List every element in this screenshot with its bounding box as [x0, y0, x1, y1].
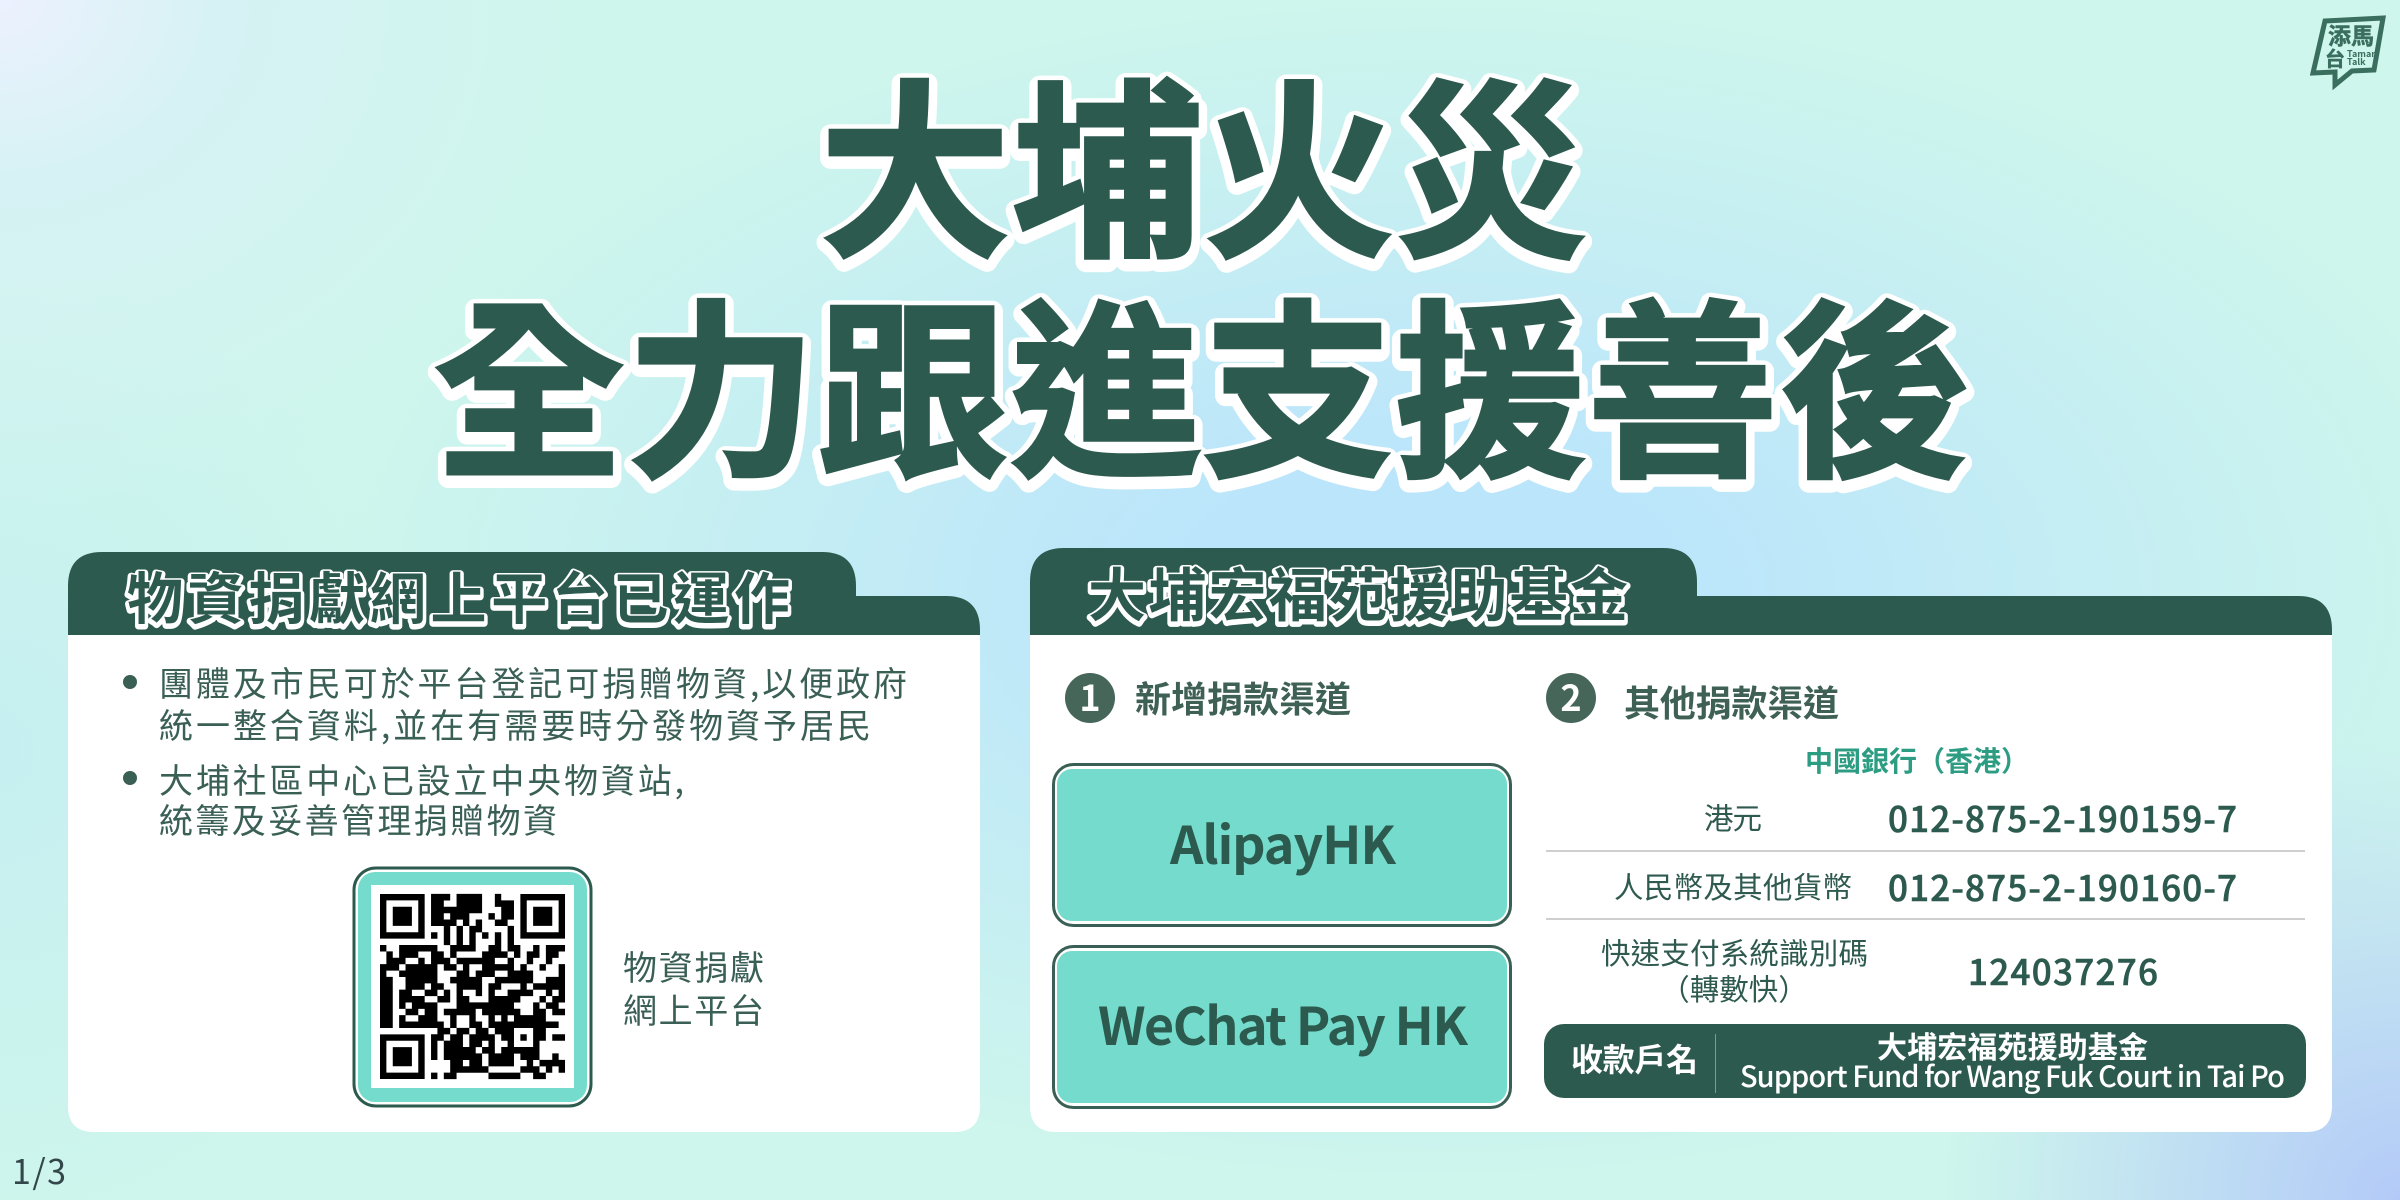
QR caption: [623, 941, 764, 1033]
title: [434, 21, 1970, 520]
section 2 heading: [1546, 670, 1839, 727]
title: 大埔火災: [820, 25, 1586, 300]
panel body: [1030, 635, 2332, 1132]
bullet list: 統籌及妥善管理捐贈物資: [159, 794, 557, 843]
account row: FPS: （轉數快）: [1660, 967, 1808, 1009]
button: AlipayHK: [1054, 764, 1510, 926]
panel heading: 物資捐獻網上平台已運作: [127, 557, 790, 638]
account row: RMB and other currencies: 012-875-2-190160-7: [1888, 861, 2237, 912]
button: WeChat Pay HK: [1054, 946, 1510, 1108]
bank name: 中國銀行（香港）: [1805, 740, 2029, 780]
logo: Tamar Talk speech bubble: Tamar: [2347, 47, 2375, 60]
account row: HKD: 港元: [1704, 796, 1762, 838]
page number: 1/3: [12, 1145, 66, 1194]
panel header tab: [1030, 548, 2332, 635]
bullet list: [123, 657, 907, 843]
panel body: [68, 635, 980, 1132]
payee bar: 大埔宏福苑援助基金: [1877, 1023, 2148, 1067]
account row: RMB and other currencies: 人民幣及其他貨幣: [1614, 865, 1852, 907]
button: AlipayHK: AlipayHK: [1169, 804, 1396, 879]
section 1 heading: 1: [1079, 670, 1101, 722]
account row: FPS: 快速支付系統識別碼: [1601, 931, 1868, 973]
payee bar: 收款戶名: [1571, 1035, 1698, 1081]
logo: Tamar Talk speech bubble: 添馬: [2328, 17, 2374, 51]
button: WeChat Pay HK: WeChat Pay HK: [1098, 985, 1468, 1060]
account row: FPS: [1601, 931, 2158, 1009]
title: 大埔火災: [820, 21, 1586, 296]
section 2 heading: 其他捐款渠道: [1624, 675, 1839, 727]
title: 全力跟進支援善後: [434, 241, 1970, 516]
QR caption: 網上平台: [623, 984, 764, 1033]
logo: Tamar Talk speech bubble: 台: [2325, 43, 2345, 72]
payee bar: Support Fund for Wang Fuk Court in Tai Po: [1740, 1054, 2285, 1096]
bullet list: 大埔社區中心已設立中央物資站,: [159, 754, 684, 803]
panel: donation platform: [68, 552, 980, 1132]
panel heading: 大埔宏福苑援助基金: [1088, 549, 1628, 633]
bullet list: 團體及市民可於平台登記可捐贈物資,以便政府: [159, 657, 907, 706]
title: 全力跟進支援善後: [434, 245, 1970, 520]
payee bar: [1544, 1023, 2306, 1098]
section 2 heading: 2: [1560, 670, 1582, 722]
logo: Tamar Talk speech bubble: Talk: [2347, 55, 2366, 68]
logo: Tamar Talk speech bubble: [2313, 17, 2383, 85]
QR caption: 物資捐獻: [623, 941, 764, 990]
panel: support fund: [1030, 548, 2332, 1132]
QR code frame: [354, 868, 591, 1106]
section 1 heading: 新增捐款渠道: [1135, 671, 1351, 723]
panel heading: 物資捐獻網上平台已運作: [127, 555, 790, 636]
account row: HKD: 012-875-2-190159-7: [1888, 792, 2237, 843]
account row: FPS: 124037276: [1968, 945, 2158, 996]
account row: RMB and other currencies: [1614, 861, 2237, 912]
panel header tab: [68, 552, 980, 635]
panel heading: 大埔宏福苑援助基金: [1088, 551, 1628, 635]
account row: HKD: [1704, 792, 2237, 843]
bullet list: 統一整合資料,並在有需要時分發物資予居民: [159, 699, 871, 748]
